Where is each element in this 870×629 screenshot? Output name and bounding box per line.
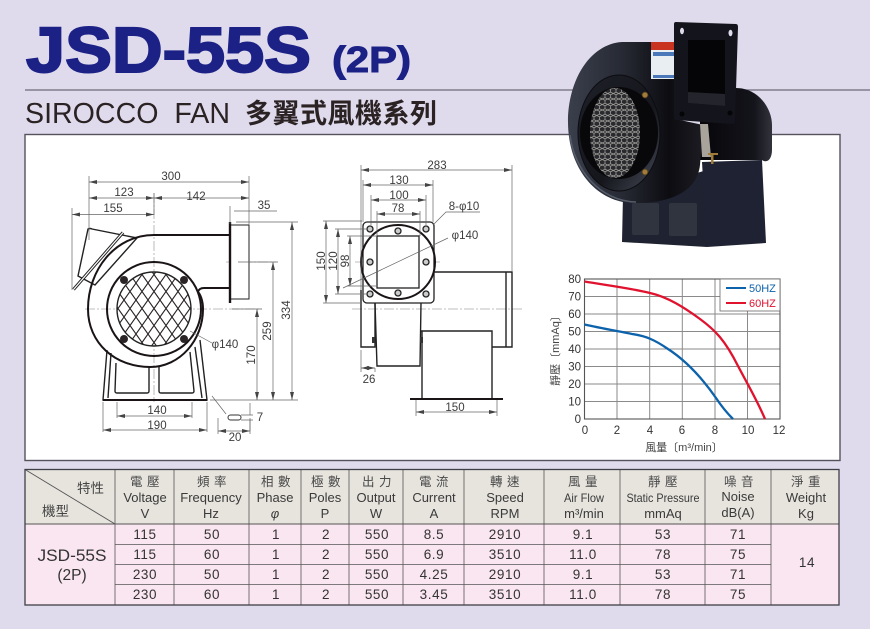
header: frequency: Frequency [180,490,242,505]
row 1: 2 [322,527,330,542]
row 2: 75 [730,547,746,562]
front view centre lines [352,222,524,309]
row 3: 550 [365,567,389,582]
header: noise: 噪音 [724,474,758,489]
side view drawing [72,171,298,444]
y axis labels: 80 [568,274,581,286]
front view dimensions: 26 [363,374,375,386]
y axis labels: 0 [575,414,581,426]
header: output: Output [356,490,396,505]
mounting bolts [120,276,188,343]
table body background [25,524,839,605]
row 4: 3.45 [420,587,448,602]
row 2: 11.0 [569,547,597,562]
header: output [356,475,396,521]
front view drawing [316,160,524,416]
photo: outlet opening [688,40,725,106]
row 4: 1 [272,587,280,602]
row 3: 71 [730,567,746,582]
photo: inlet opening [580,87,658,179]
photo: ring [578,75,660,191]
header: weight: 淨重 [791,474,825,489]
row 4: 550 [365,587,389,602]
header: output: 出力 [362,475,396,489]
hood damper plate [74,232,123,290]
header: phase: φ [271,506,280,521]
row 1: 50 [204,527,220,542]
front view dimensions: 150 [445,402,465,414]
side view dimensions: 190 [147,420,167,432]
motor mount [375,303,421,366]
photo: stand front [622,170,707,247]
corner header cell: 特性 [77,481,104,496]
row 1: 1 [272,527,280,542]
side view dimensions: 334 [281,300,293,320]
header: static pressure: 靜壓 [648,475,682,489]
photo: rating label [651,42,675,79]
row 4: 2 [322,587,330,602]
row 1: 115 [133,527,157,542]
y axis labels: 10 [568,396,581,408]
stand outline [103,340,207,400]
scroll housing [88,235,230,367]
header: static pressure [626,475,700,521]
model name cell: JSD-55S [38,547,106,565]
side view dimensions: 20 [229,432,241,444]
front view dimensions [316,160,512,416]
header: current: A [430,506,439,521]
row 2 [133,547,746,562]
blower side plate [361,290,375,347]
row 4: 230 [133,587,157,602]
table grid [25,470,839,605]
header: current: 電流 [419,475,453,489]
side view dimensions: 140 [147,405,167,417]
row 1: 2910 [489,527,521,542]
header: frequency: 頻率 [197,474,231,489]
row 2: 60 [204,547,220,562]
row 1: 8.5 [424,527,444,542]
header: voltage: V [141,506,150,521]
photo: scroll housing [568,42,703,203]
front view dimensions: 100 [389,190,409,202]
header: poles: Poles [309,490,342,505]
round flange and opening [361,225,435,299]
side view dimensions: 300 [161,171,181,183]
row 2: 2 [322,547,330,562]
photo: stand side panel [702,160,766,247]
row 2: 3510 [489,547,521,562]
photo: housing rim highlight [570,135,636,202]
row 4 [133,587,746,602]
x axis labels: 2 [614,425,620,437]
header: static pressure: Static Pressure [626,491,700,505]
inlet grille mesh [115,270,193,348]
front view dimensions: 130 [389,175,409,187]
row 1: 53 [655,527,671,542]
y axis labels: 30 [568,362,581,374]
x axis labels: 4 [647,425,654,437]
front view dimensions: 283 [427,160,447,172]
flange holes [367,226,429,297]
panel: drawings and chart [25,134,840,460]
header: phase: 相數 [261,475,295,489]
outlet flange [230,222,249,303]
foot [372,331,503,399]
intake hood [78,228,137,285]
model name cell [38,547,106,584]
header: noise: dB(A) [721,505,755,520]
row 4: 60 [204,587,220,602]
y axis labels: 50 [568,326,581,338]
header: poles [309,474,345,521]
x axis labels: 0 [582,425,588,437]
curve: 60 Hz [584,282,765,419]
header: voltage: Voltage [123,490,167,505]
inlet ring [107,262,201,356]
product photo [568,22,772,247]
photo: flange holes [680,28,732,36]
header: air flow [564,475,604,521]
photo: outlet lower wall [688,92,725,106]
header: speed: RPM [491,506,519,521]
header: air flow: Air Flow [564,491,604,505]
photo: brass bolts [642,92,648,175]
header: frequency [180,474,242,521]
performance chart [548,274,785,454]
row 1: 550 [365,527,389,542]
row 3: 1 [272,567,280,582]
front view dimensions: 150 [316,251,328,271]
header: current [412,475,456,521]
header: phase: Phase [257,490,293,505]
row 4: 11.0 [569,587,597,602]
series name: Sirocco Fan [25,98,438,130]
series name: Sirocco Fan: SIROCCO FAN [25,98,230,130]
row 4: 3510 [489,587,521,602]
row 3: 2 [322,567,330,582]
x axis title: 風量〔m³/min〕 [645,441,723,454]
motor cylinder [430,272,512,347]
photo: rear motor cylinder [700,88,772,161]
row 2: 6.9 [424,547,444,562]
corner header cell [42,481,104,519]
header: air flow: 風量 [568,475,602,489]
chart legend: 50HZ [749,283,776,295]
header: weight: Kg [798,506,814,521]
y axis labels: 70 [568,292,581,304]
row 3 [133,567,746,582]
header: weight: Weight [786,490,826,505]
front view dimensions: 98 [340,255,352,267]
y axis labels: 60 [568,309,581,321]
table header background [25,470,839,524]
header: voltage [123,475,167,521]
title: JSD-55S: JSD-55S [26,14,311,86]
photo: stand bolt [708,153,718,164]
header: speed: Speed [486,490,524,505]
row 2: 1 [272,547,280,562]
header: poles: 極數 [311,474,345,489]
side view dimensions: 7 [257,412,263,424]
side view dimensions: 142 [186,191,206,203]
front view dimensions: 78 [392,203,404,215]
photo: metal strip [700,124,711,157]
series name: Sirocco Fan: 多翼式風機系列 [245,99,438,129]
y axis title: 靜壓〔mmAq〕 [548,310,562,386]
row 4: 78 [655,587,671,602]
side view dimensions: 259 [262,321,274,341]
header: voltage: 電壓 [130,475,164,489]
x axis labels: 10 [742,425,754,437]
y axis labels [568,274,581,426]
side view dimensions: 170 [246,345,258,365]
row 4: 75 [730,587,746,602]
mounting slot detail [228,415,241,420]
row 3: 230 [133,567,157,582]
row 3: 2910 [489,567,521,582]
row 3: 53 [655,567,671,582]
photo: outlet flange [674,22,738,124]
square flange [363,222,434,303]
header: current: Current [412,490,456,505]
x axis labels [582,425,785,437]
specification table [25,470,839,605]
row 3: 50 [204,567,220,582]
y axis labels: 20 [568,379,581,391]
header rule [25,89,870,91]
model name cell: (2P) [57,567,87,584]
side view dimensions [72,171,298,444]
header: frequency: Hz [203,506,219,521]
row 3: 4.25 [420,567,448,582]
header: speed [486,474,524,521]
header: speed: 轉速 [490,474,524,489]
header: poles: P [321,506,329,521]
side view dimensions: 35 [258,200,270,212]
row 2: 78 [655,547,671,562]
x axis labels: 8 [712,425,718,437]
side view dimensions: 155 [103,203,123,215]
side view centre lines [85,193,276,402]
header: noise [721,474,758,520]
chart legend: 60HZ [749,298,776,310]
row 1: 9.1 [573,527,593,542]
row 2: 115 [133,547,157,562]
row 2: 550 [365,547,389,562]
side view dimensions: φ140 [212,339,238,351]
header: phase [257,475,295,521]
chart grid [584,279,780,419]
header: static pressure: mmAq [644,506,682,521]
row 1 [133,527,746,542]
curve: 50 Hz [584,324,733,419]
row 3: 9.1 [573,567,593,582]
corner header cell: 機型 [42,504,69,519]
weight cell: 14 [799,555,815,570]
photo: grille mesh [590,88,640,178]
row 1: 71 [730,527,746,542]
front view dimensions: 120 [328,251,340,271]
side view dimensions: 123 [114,187,134,199]
header: output: W [370,506,383,521]
y axis labels: 40 [568,344,581,356]
x axis labels: 12 [773,425,785,437]
subtitle: (2P): (2P) [332,39,411,80]
header: weight [786,474,826,521]
x axis labels: 6 [679,425,685,437]
front view dimensions: 8-φ10 [449,201,479,213]
front view dimensions: φ140 [452,230,478,242]
chart legend [720,279,780,311]
header: air flow: m³/min [564,506,604,521]
header: noise: Noise [721,489,755,504]
